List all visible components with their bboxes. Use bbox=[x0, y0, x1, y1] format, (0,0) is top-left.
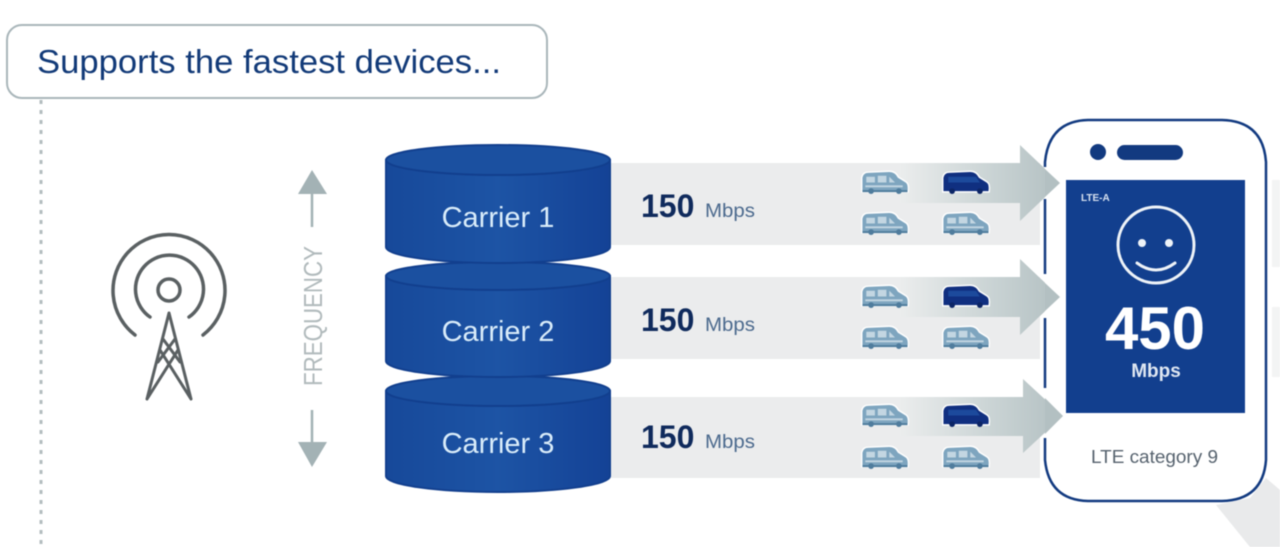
arrow 2 bbox=[900, 259, 1060, 335]
icon: cell tower bbox=[113, 235, 225, 399]
dotted timeline line bbox=[40, 100, 42, 547]
frequency axis bbox=[298, 170, 328, 467]
total speed: 450 bbox=[1105, 295, 1205, 362]
unit 2: Mbps bbox=[705, 315, 755, 336]
speed 3: 150 bbox=[641, 419, 694, 455]
carrier 2 cylinder: Carrier 2 bbox=[442, 316, 554, 348]
arrow 1 bbox=[900, 145, 1060, 221]
unit 3: Mbps bbox=[705, 432, 755, 453]
carrier 3 cylinder bbox=[386, 376, 610, 492]
device category: LTE category 9 bbox=[1091, 447, 1218, 467]
arrow 3 bbox=[900, 379, 1063, 453]
carrier 1 cylinder bbox=[386, 145, 610, 263]
total unit: Mbps bbox=[1131, 361, 1181, 382]
vehicles 3 bbox=[862, 405, 989, 469]
screen bbox=[1066, 180, 1245, 413]
LTE-A label: LTE-A bbox=[1081, 193, 1110, 204]
speed 1: 150 bbox=[641, 188, 694, 224]
carrier 3 cylinder: Carrier 3 bbox=[442, 428, 554, 460]
frequency label: FREQUENCY bbox=[298, 246, 328, 386]
unit 1: Mbps bbox=[705, 201, 755, 222]
carrier 1 cylinder: Carrier 1 bbox=[442, 202, 554, 234]
band 2 bbox=[611, 259, 1060, 359]
speed 2: 150 bbox=[641, 302, 694, 338]
background corner shape bbox=[1216, 478, 1280, 547]
arrow: frequency up bbox=[298, 170, 327, 227]
arrow: frequency down bbox=[298, 410, 327, 467]
vehicles 2 bbox=[862, 286, 989, 349]
background strips right of phone bbox=[1272, 180, 1280, 377]
band 3 bbox=[611, 379, 1063, 478]
phone body bbox=[1045, 120, 1266, 501]
camera dot bbox=[1090, 144, 1106, 160]
band 1 bbox=[611, 145, 1060, 245]
phone bbox=[1045, 120, 1266, 501]
carrier 2 cylinder bbox=[386, 262, 610, 377]
heading box: Supports the fastest devices... bbox=[37, 44, 501, 81]
speaker bbox=[1117, 145, 1183, 160]
heading box bbox=[7, 25, 547, 98]
icon: smiley bbox=[1118, 207, 1194, 283]
vehicles 1 bbox=[862, 172, 989, 235]
arrow tips over phone bbox=[1045, 169, 1063, 434]
